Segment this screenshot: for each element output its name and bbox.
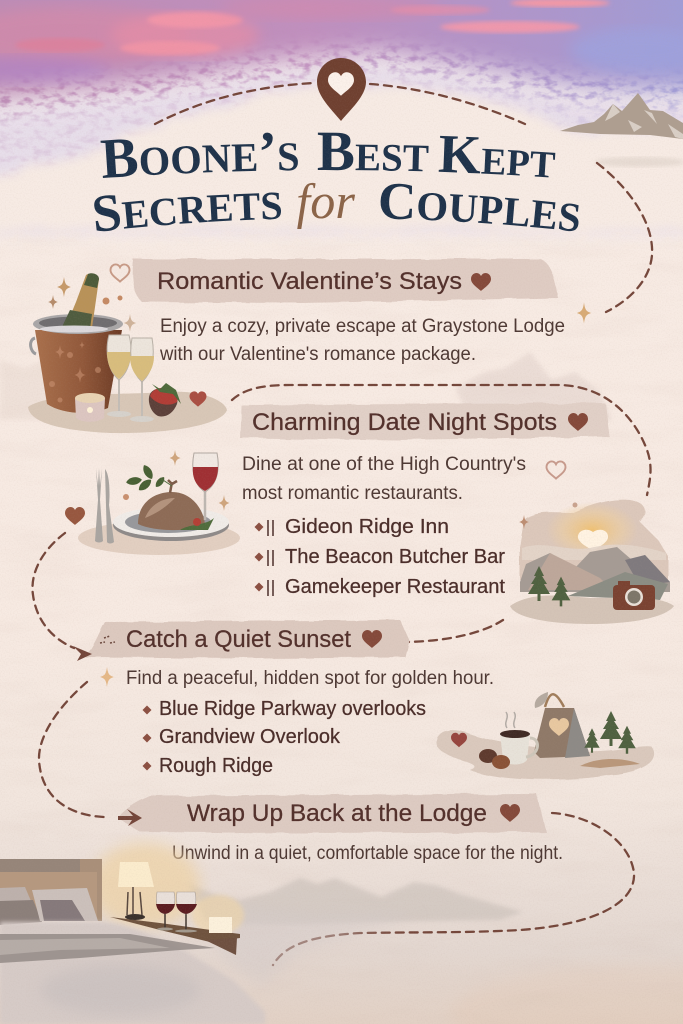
overlook list: Rough Ridge <box>159 755 273 777</box>
arrow <box>73 646 92 661</box>
description: Dine at one of the High Country's <box>242 454 526 475</box>
heading: Catch a Quiet Sunset <box>126 626 351 653</box>
icon: hearts near dinner <box>65 461 566 525</box>
heading: Romantic Valentine’s Stays <box>157 268 462 295</box>
icon: sparkle <box>100 667 114 687</box>
description: Find a peaceful, hidden spot for golden hour. <box>126 668 494 689</box>
restaurant list <box>254 516 505 598</box>
title: BOONE’S <box>100 132 298 178</box>
restaurant list: Gamekeeper Restaurant <box>285 576 505 598</box>
icon: heart <box>568 413 588 431</box>
illustration: coffee and gift bag <box>436 692 654 780</box>
icon: heart <box>500 804 520 822</box>
heading band <box>132 259 558 303</box>
icon: hearts and sparkles near champagne <box>48 264 591 332</box>
route: dashed path <box>32 83 652 965</box>
title: BEST <box>318 132 429 172</box>
panel: romantic valentine's stays: with our Valentine's romance package. <box>159 344 476 365</box>
title: KEPT <box>438 136 556 178</box>
description: Unwind in a quiet, comfortable space for the night. <box>172 843 563 864</box>
illustration: champagne bucket <box>28 273 227 433</box>
arrow <box>118 809 142 826</box>
heading: Wrap Up Back at the Lodge <box>187 800 487 827</box>
map pin with heart <box>317 58 366 121</box>
illustration: plated dinner and wine <box>78 450 240 555</box>
overlook list: Grandview Overlook <box>159 726 341 748</box>
heading band <box>240 403 609 440</box>
title <box>94 132 579 232</box>
restaurant list: The Beacon Butcher Bar <box>285 546 505 568</box>
sunset sky with clouds <box>0 0 683 230</box>
panel: charming date night spots <box>240 403 609 598</box>
restaurant list: Gideon Ridge Inn <box>285 516 449 538</box>
mountains top right <box>560 93 683 167</box>
icon: heart <box>471 273 491 291</box>
overlook list <box>142 698 426 777</box>
panel: catch a quiet sunset <box>73 620 494 777</box>
heading: Charming Date Night Spots <box>252 409 557 436</box>
panel: charming date night spots: most romantic restaurants. <box>242 483 463 504</box>
illustration: bed and nightstand <box>0 843 265 1024</box>
faint background mountains <box>0 352 612 420</box>
title: for <box>297 182 355 229</box>
heading band <box>85 620 409 658</box>
title: COUPLES <box>380 184 579 232</box>
panel: wrap up back at the lodge <box>118 794 563 864</box>
illustration: mountain sunset and camera <box>510 500 674 624</box>
icon: heart <box>362 630 382 648</box>
panel: romantic valentine's stays <box>132 259 565 365</box>
icon: birds <box>100 636 115 643</box>
description: Enjoy a cozy, private escape at Graystone Lodge <box>160 316 565 337</box>
overlook list: Blue Ridge Parkway overlooks <box>159 698 426 720</box>
title: SECRETS <box>94 192 281 232</box>
background mountains bottom <box>187 878 523 985</box>
heading band <box>118 794 546 833</box>
